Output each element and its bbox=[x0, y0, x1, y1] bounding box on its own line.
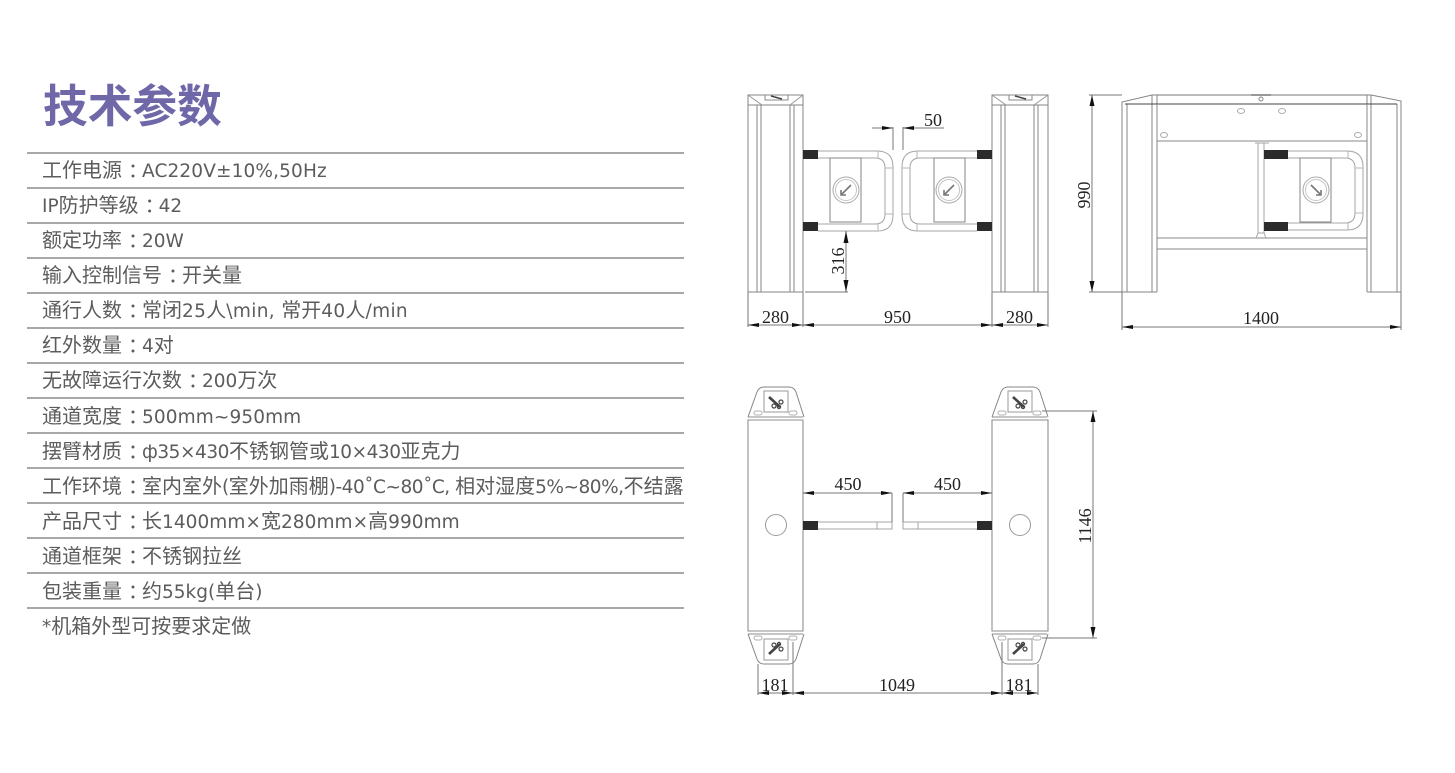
front dimension lines bbox=[748, 126, 1048, 327]
arm post bbox=[1255, 143, 1269, 238]
side swing arm bbox=[1264, 150, 1363, 231]
title: 技术参数 bbox=[43, 83, 222, 132]
spec: cycles: 无故障运行次数 ：200万次 bbox=[42, 370, 277, 392]
spec: package weight: 包装重量 ：约55kg(单台) bbox=[42, 581, 262, 603]
dimension: 181 left: 181 bbox=[762, 675, 788, 695]
right swing arm bbox=[902, 150, 992, 231]
left post bbox=[748, 95, 803, 292]
side dimension lines bbox=[1089, 95, 1401, 330]
spec: input signal: 输入控制信号 ：开关量 bbox=[42, 265, 242, 287]
spec: IP rating: IP防护等级 ：42 bbox=[42, 195, 182, 217]
dimension: 316: 316 bbox=[828, 248, 848, 274]
left arm top view bbox=[803, 521, 892, 530]
dimension: 181 right: 181 bbox=[1006, 675, 1032, 695]
right post bbox=[992, 95, 1048, 292]
spec: product size: 产品尺寸 ：长1400mm×宽280mm×高990mm bbox=[42, 511, 460, 533]
spec: rated power: 额定功率 ：20W bbox=[42, 230, 184, 252]
dimension: 1146: 1146 bbox=[1075, 508, 1095, 544]
dimension: 280 right: 280 bbox=[1006, 307, 1033, 327]
spec: arm material: 摆臂材质 ：ф35×430不锈钢管或10×430亚克力 bbox=[42, 441, 461, 463]
right post top view bbox=[992, 387, 1048, 664]
dimension: 280 left: 280 bbox=[762, 307, 789, 327]
spec: power: 工作电源 ：AC220V±10%,50Hz bbox=[42, 160, 327, 182]
top view drawing bbox=[748, 387, 1097, 695]
spec: frame: 通道框架 ：不锈钢拉丝 bbox=[42, 546, 242, 568]
spec: lane width: 通道宽度 ：500mm~950mm bbox=[42, 406, 301, 428]
panel: specification list bbox=[27, 152, 684, 638]
side view drawing bbox=[1074, 95, 1401, 330]
front view drawing bbox=[748, 95, 1048, 327]
spec: throughput: 通行人数 ：常闭25人\min, 常开40人/min bbox=[42, 300, 408, 322]
left post top view bbox=[748, 387, 804, 664]
spec: environment: 工作环境 ：室内室外(室外加雨棚)-40˚C~80˚C, 相对湿度5%~80%,不结露 bbox=[42, 476, 684, 498]
dimension: 50: 50 bbox=[924, 110, 942, 130]
note: custom housing: *机箱外型可按要求定做 bbox=[42, 616, 251, 638]
left swing arm bbox=[803, 150, 893, 231]
top view dimension lines bbox=[758, 411, 1097, 695]
dimension: 990: 990 bbox=[1074, 182, 1094, 208]
spec: infrared count: 红外数量 ：4对 bbox=[42, 335, 174, 357]
dimension: 450 right: 450 bbox=[934, 474, 961, 494]
dimension: 1400: 1400 bbox=[1243, 308, 1279, 328]
dimension: 450 left: 450 bbox=[834, 474, 862, 494]
dimension: 950: 950 bbox=[884, 307, 911, 327]
right arm top view bbox=[903, 521, 992, 530]
dimension: 1049: 1049 bbox=[879, 675, 915, 695]
side housing bbox=[1122, 95, 1401, 292]
